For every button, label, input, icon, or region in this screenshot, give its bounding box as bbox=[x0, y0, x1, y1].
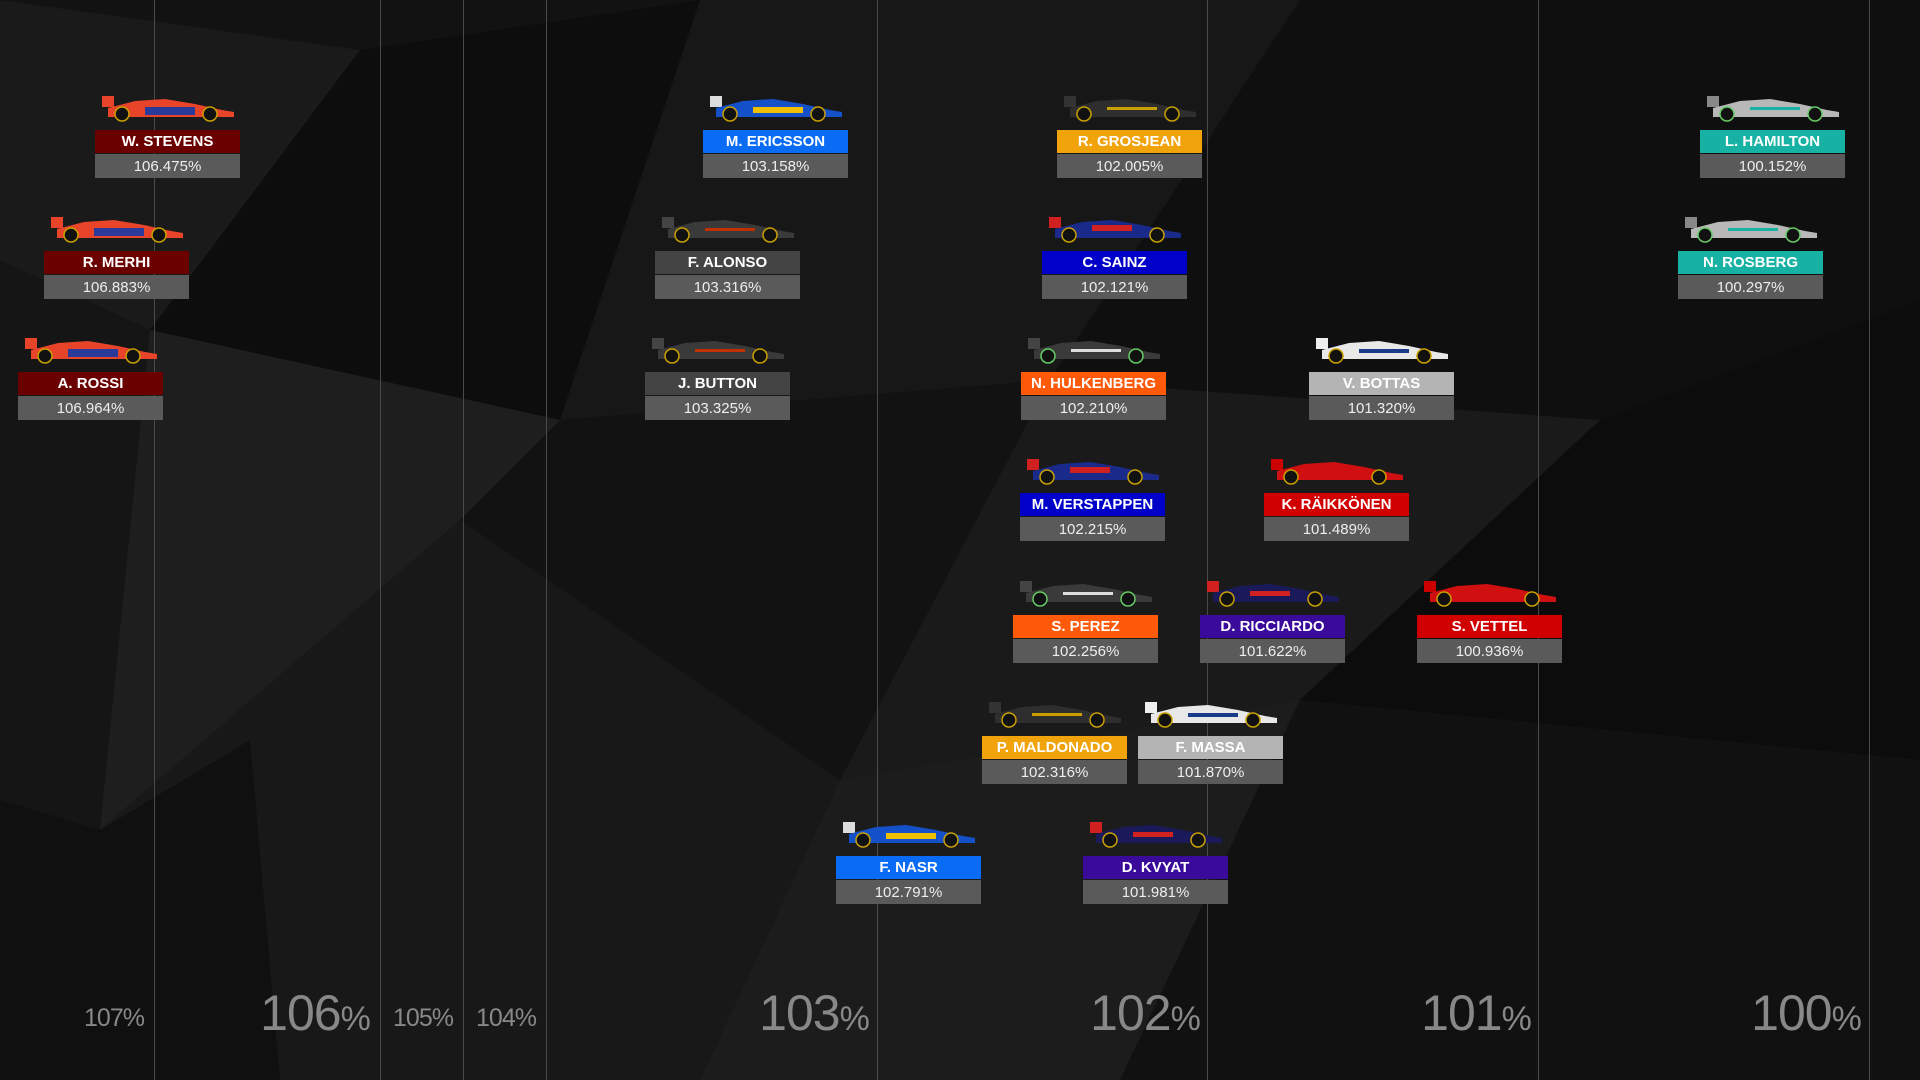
card: W. Stevens: W. STEVENS bbox=[122, 133, 213, 150]
card: N. Rosberg bbox=[1678, 217, 1823, 299]
card: F. Alonso bbox=[655, 217, 800, 299]
card: N. Hulkenberg bbox=[1021, 338, 1166, 420]
card: P. Maldonado bbox=[982, 702, 1127, 784]
card: F. Nasr: 102.791% bbox=[875, 884, 942, 901]
card: N. Rosberg: N. ROSBERG bbox=[1703, 254, 1798, 271]
card: F. Nasr: F. NASR bbox=[879, 859, 938, 876]
card: V. Bottas: V. BOTTAS bbox=[1343, 375, 1420, 392]
card: N. Hulkenberg: N. HULKENBERG bbox=[1031, 375, 1156, 392]
card: J. Button: J. BUTTON bbox=[678, 375, 757, 392]
grid lines bbox=[154, 0, 155, 1080]
axis labels: 105% bbox=[393, 1004, 453, 1032]
card: S. Vettel: 100.936% bbox=[1456, 643, 1523, 660]
card: S. Perez bbox=[1013, 581, 1158, 663]
card: F. Alonso: F. ALONSO bbox=[688, 254, 767, 271]
card: F. Alonso: 103.316% bbox=[694, 279, 761, 296]
axis labels: 101% bbox=[1421, 985, 1531, 1041]
card: R. Merhi bbox=[44, 217, 189, 299]
card: R. Merhi: 106.883% bbox=[83, 279, 150, 296]
card: M. Verstappen bbox=[1020, 459, 1165, 541]
card: V. Bottas: 101.320% bbox=[1348, 400, 1415, 417]
card: S. Vettel: S. VETTEL bbox=[1452, 618, 1527, 635]
card: D. Ricciardo: 101.622% bbox=[1239, 643, 1306, 660]
axis labels: 104% bbox=[476, 1004, 536, 1032]
card: D. Kvyat: D. KVYAT bbox=[1122, 859, 1189, 876]
axis labels: 107% bbox=[84, 1004, 144, 1032]
card: R. Grosjean: 102.005% bbox=[1096, 158, 1163, 175]
card: C. Sainz: 102.121% bbox=[1081, 279, 1148, 296]
card: K. Raikkonen bbox=[1264, 459, 1409, 541]
card: M. Verstappen: M. VERSTAPPEN bbox=[1032, 496, 1153, 513]
card: D. Kvyat bbox=[1083, 822, 1228, 904]
card: S. Perez: S. PEREZ bbox=[1051, 618, 1120, 635]
card: P. Maldonado: 102.316% bbox=[1021, 764, 1088, 781]
card: L. Hamilton bbox=[1700, 96, 1845, 178]
card: D. Ricciardo bbox=[1200, 581, 1345, 663]
card: F. Massa bbox=[1138, 702, 1283, 784]
card: W. Stevens bbox=[95, 96, 240, 178]
card: N. Rosberg: 100.297% bbox=[1717, 279, 1784, 296]
card: M. Ericsson bbox=[703, 96, 848, 178]
axis labels: 100% bbox=[1751, 985, 1861, 1041]
axis labels: 102% bbox=[1090, 985, 1200, 1041]
card: W. Stevens: 106.475% bbox=[134, 158, 201, 175]
axis labels: 106% bbox=[260, 985, 370, 1041]
card: A. Rossi: 106.964% bbox=[57, 400, 124, 417]
card: R. Grosjean: R. GROSJEAN bbox=[1078, 133, 1181, 150]
card: F. Massa: F. MASSA bbox=[1175, 739, 1246, 756]
card: L. Hamilton: L. HAMILTON bbox=[1725, 133, 1820, 150]
card: A. Rossi bbox=[18, 338, 163, 420]
card: J. Button bbox=[645, 338, 790, 420]
card: M. Verstappen: 102.215% bbox=[1059, 521, 1126, 538]
card: A. Rossi: A. ROSSI bbox=[58, 375, 123, 392]
card: K. Raikkonen: K. RÄIKKÖNEN bbox=[1281, 496, 1392, 513]
card: K. Raikkonen: 101.489% bbox=[1303, 521, 1370, 538]
card: D. Kvyat: 101.981% bbox=[1122, 884, 1189, 901]
card: F. Massa: 101.870% bbox=[1177, 764, 1244, 781]
card: S. Vettel bbox=[1417, 581, 1562, 663]
card: C. Sainz bbox=[1042, 217, 1187, 299]
card: R. Merhi: R. MERHI bbox=[83, 254, 150, 271]
card: N. Hulkenberg: 102.210% bbox=[1060, 400, 1127, 417]
card: S. Perez: 102.256% bbox=[1052, 643, 1119, 660]
card: M. Ericsson: 103.158% bbox=[742, 158, 809, 175]
card: M. Ericsson: M. ERICSSON bbox=[726, 133, 825, 150]
card: D. Ricciardo: D. RICCIARDO bbox=[1220, 618, 1325, 635]
card: J. Button: 103.325% bbox=[684, 400, 751, 417]
card: P. Maldonado: P. MALDONADO bbox=[997, 739, 1112, 756]
axis labels: 103% bbox=[759, 985, 869, 1041]
card: V. Bottas bbox=[1309, 338, 1454, 420]
card: F. Nasr bbox=[836, 822, 981, 904]
card: C. Sainz: C. SAINZ bbox=[1082, 254, 1147, 271]
card: R. Grosjean bbox=[1057, 96, 1202, 178]
card: L. Hamilton: 100.152% bbox=[1739, 158, 1806, 175]
